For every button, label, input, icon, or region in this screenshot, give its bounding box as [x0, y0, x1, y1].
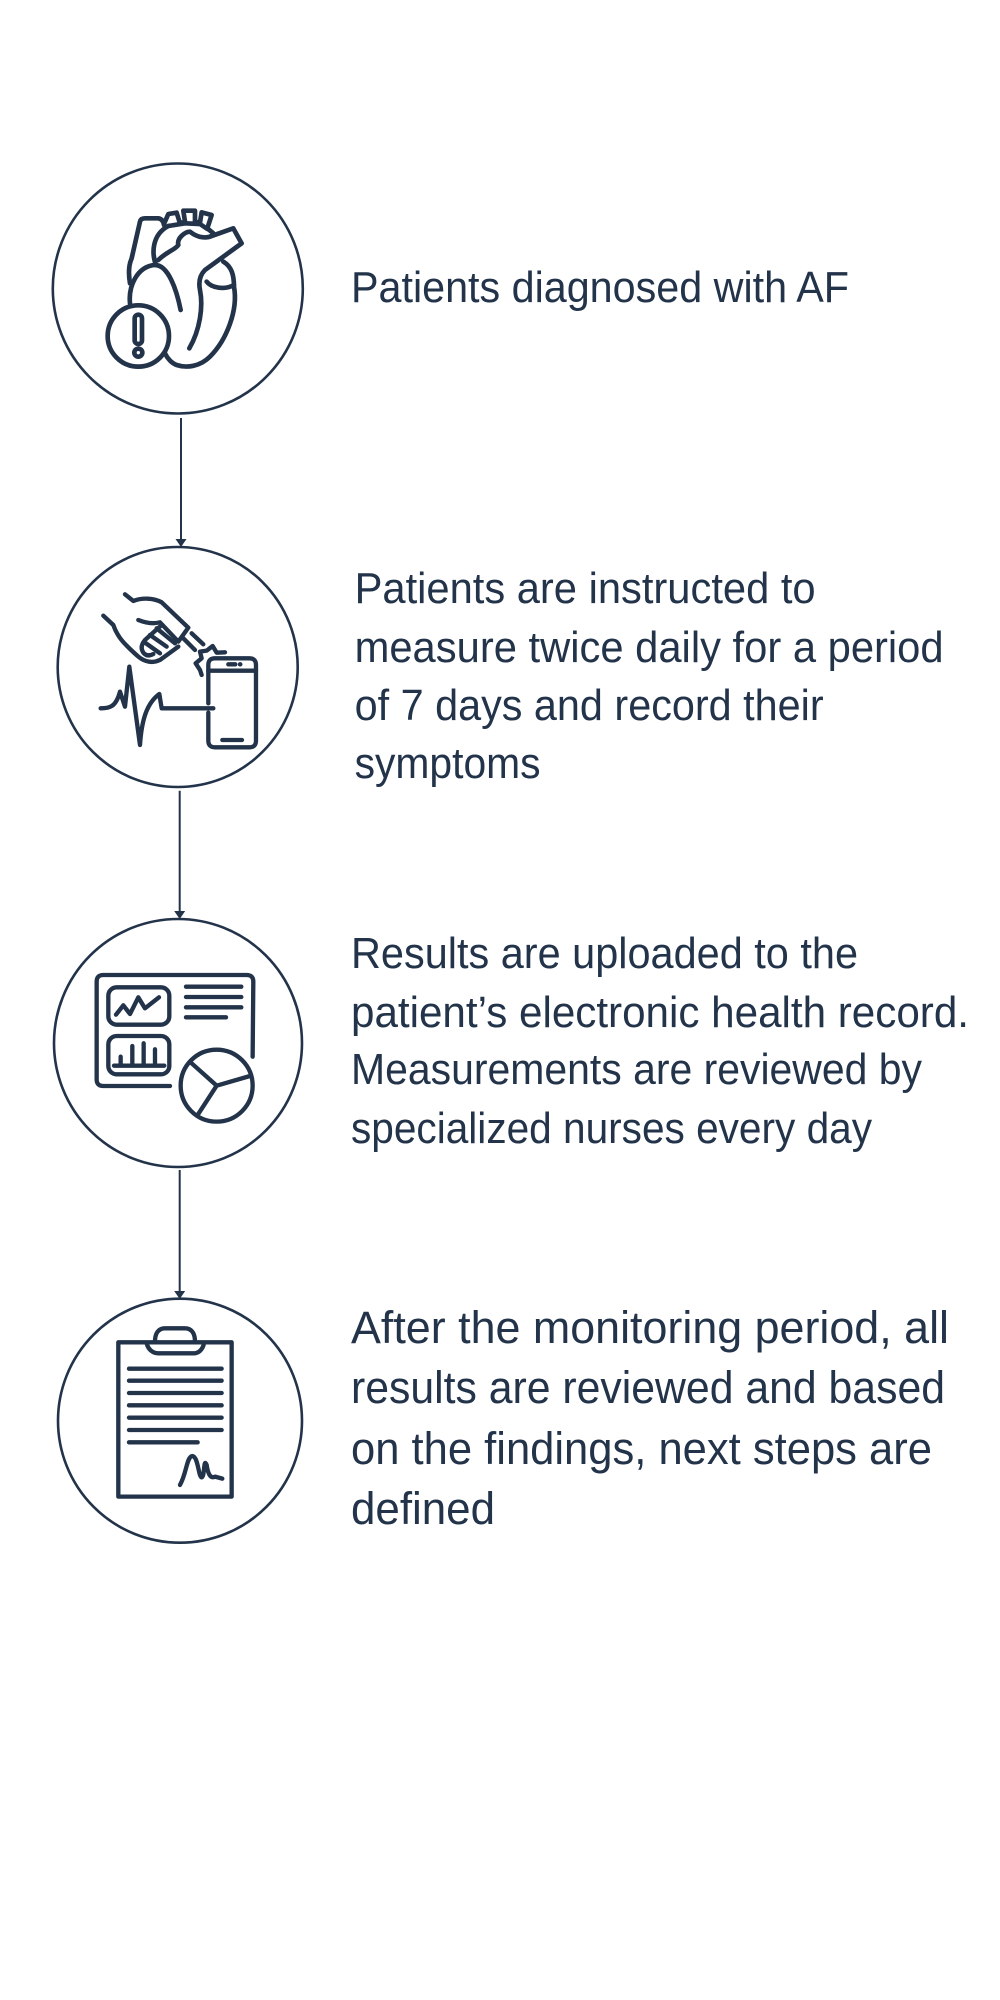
step 4 circle — [58, 1299, 302, 1543]
icon: clipboard with signature — [118, 1328, 232, 1497]
step 2 circle — [58, 547, 298, 787]
arrow 3 — [174, 1170, 185, 1299]
arrow 2 — [174, 791, 185, 919]
text: step 4: defined — [351, 1483, 495, 1534]
text: step 1: Patients diagnosed with AF — [351, 263, 849, 312]
icon: hand tapping phone with ECG — [101, 594, 256, 747]
text: step 2 — [355, 564, 944, 788]
text: step 2: of 7 days and record their — [355, 681, 824, 730]
step 3 circle — [54, 919, 302, 1167]
text: step 4: results are reviewed and based — [351, 1362, 945, 1413]
text: step 3: specialized nurses every day — [351, 1104, 872, 1153]
text: step 4 — [351, 1302, 949, 1534]
text: step 3 — [351, 929, 969, 1153]
icon: heart with alert — [108, 211, 242, 367]
text: step 2: symptoms — [355, 739, 541, 788]
text: step 4: on the findings, next steps are — [351, 1423, 932, 1474]
text: step 3: patient’s electronic health record. — [351, 988, 969, 1037]
text: step 3: Results are uploaded to the — [351, 929, 858, 978]
text: step 2: Patients are instructed to — [355, 564, 816, 613]
arrow 1 — [176, 418, 186, 547]
text: step 4: After the monitoring period, all — [351, 1302, 949, 1353]
text: step 2: measure twice daily for a period — [355, 623, 944, 672]
step 1 circle — [53, 164, 303, 414]
icon: dashboard with charts — [97, 975, 253, 1122]
text: step 3: Measurements are reviewed by — [351, 1045, 922, 1094]
